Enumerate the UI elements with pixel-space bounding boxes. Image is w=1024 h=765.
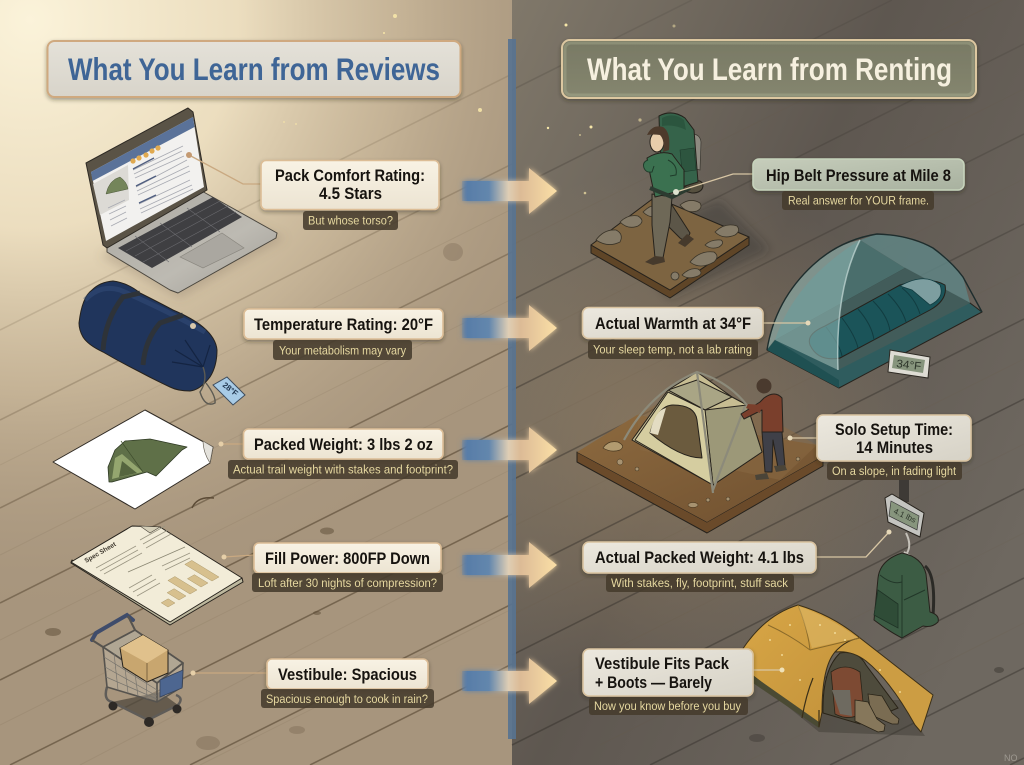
icon: hanging scale and green backpack [874,480,938,638]
icon: shopping cart with box [92,615,183,727]
subnote: Your sleep temp [588,340,758,359]
subnote: Real answer: Real answer for YOUR frame. [788,194,929,208]
subnote: Your metabolism may vary [273,340,412,360]
card: Vestibule Fits Pack: Vestibule Fits Pack [595,654,729,673]
subnote: Spacious enough [261,689,434,708]
card: Pack Comfort Rating: 4.5 Stars [319,184,382,203]
card: Solo Setup Time [817,415,971,480]
connector: tent to Actual Warmth card [763,320,810,326]
heading: What You Learn from Renting [562,40,976,98]
card: Packed Weight: Packed Weight: 3 lbs 2 oz [254,435,433,454]
central divider bar [508,39,516,739]
icon: navy sleeping bag with tag: 28°F [221,380,240,398]
card: Actual Warmth: Actual Warmth at 34°F [595,314,751,333]
icon: spec sheet with tent picture [53,410,213,509]
icon: hanging scale and green backpack: 4.1 lbs [892,507,917,525]
card: Pack Comfort Rating [261,160,439,230]
connector: document to Fill Power card [222,554,254,560]
card: Vestibule Fits Pack: + Boots — Barely [595,673,712,692]
arrow 2 [462,305,557,351]
icon: person setting up tent on dirt patch [577,372,823,533]
subnote: Your metabolism may vary: Your metabolism may vary [279,344,407,358]
icon: navy sleeping bag with tag [79,281,245,405]
card: Packed Weight [228,429,458,479]
card: Actual Packed Weight [583,542,816,592]
subnote: But whose torso? [303,211,398,230]
card: Hip Belt Pressure [753,159,964,210]
card: Temperature Rating [244,309,443,339]
subnote: On a slope: On a slope, in fading light [832,464,957,478]
heading: What You Learn from Reviews: What You Learn from Reviews [68,51,440,87]
card: Pack Comfort Rating: Pack Comfort Rating: [275,166,425,185]
subnote: Loft after 30 nights: Loft after 30 nights of compression? [258,576,437,590]
icon: laptop showing reviews [86,108,285,298]
card: Actual Warmth [582,308,763,359]
subnote: Loft after 30 nights [252,573,443,592]
subnote: With stakes: With stakes, fly, footprint, stuff sack [611,576,789,590]
subnote: Now you know: Now you know before you buy [594,699,742,713]
subnote: But whose torso?: But whose torso? [308,214,393,228]
arrow 1 [462,168,557,214]
icon: specification document with bar chart: Spec Sheet [84,541,118,565]
card: Fill Power: Fill Power: 800FP Down [265,549,430,568]
connector: scale to Actual Packed Weight card [816,530,892,557]
heading: What You Learn from Reviews [48,41,460,97]
card: Solo Setup Time: Solo Setup Time: [835,420,953,439]
connector: spec sheet to Packed Weight card [218,442,243,446]
card: Vestibule Fits Pack [583,649,753,715]
icon: golden tent with pack and boots in vestibule [742,605,933,736]
subnote: Actual trail weight: Actual trail weight with stakes and footprint? [233,462,453,476]
subnote: Your sleep temp: Your sleep temp, not a lab rating [593,342,752,356]
card: Vestibule Spacious: Vestibule: Spacious [278,665,417,684]
arrow 5 [462,658,557,704]
icon: specification document with bar chart [71,526,243,625]
connector: laptop to Pack Comfort card [186,152,261,184]
subnote: Spacious enough: Spacious enough to cook in rain? [266,692,428,706]
card: Temperature Rating: Temperature Rating: 20°F [254,315,433,334]
card: Actual Packed Weight: Actual Packed Weight: 4.1 lbs [595,548,804,567]
corner mark: NO: NO [1004,753,1018,763]
card group: Temperature Rating [244,309,443,360]
connector: golden tent to Vestibule Fits card [753,668,784,672]
subnote: Real answer [782,191,934,210]
heading: What You Learn from Renting: What You Learn from Renting [587,51,952,87]
subnote: Actual trail weight [228,460,458,479]
icon: teal tent with sleeping bag and thermometer [767,234,982,388]
icon: hiker on rocky terrain [591,113,770,298]
card: Hip Belt Pressure: Hip Belt Pressure at Mile 8 [766,166,951,185]
icon: teal tent with sleeping bag and thermometer: 34°F [896,358,922,373]
connector: setup scene to Solo Setup card [788,436,817,440]
arrow 4 [462,542,557,588]
card: Fill Power [252,543,443,592]
arrow 3 [462,427,557,473]
connector: hiker to Hip Belt card [673,174,753,195]
card: Vestibule Spacious [261,659,434,708]
card: Solo Setup Time: 14 Minutes [856,438,933,457]
connector: cart to Vestibule card [190,670,267,676]
